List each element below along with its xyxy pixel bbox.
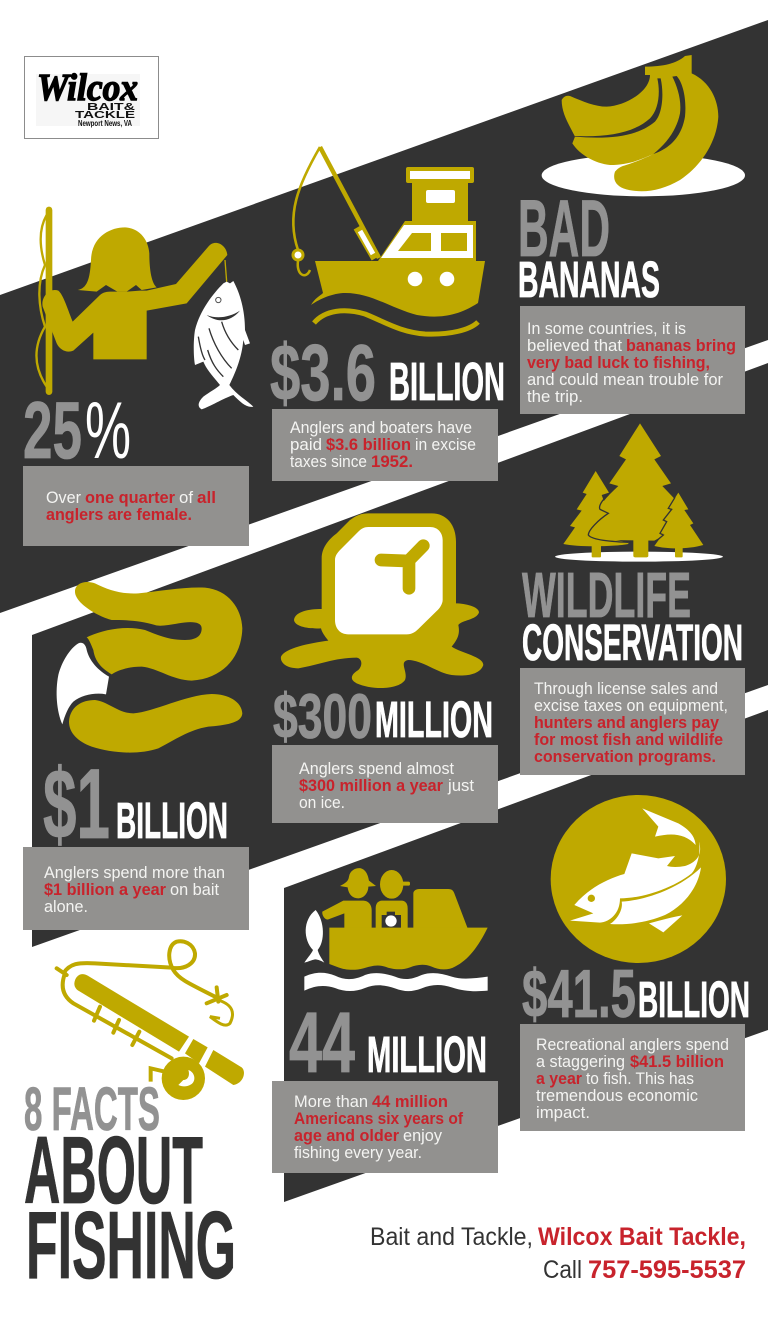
background band: top xyxy=(0,20,768,613)
icon: people on a boat xyxy=(304,868,488,991)
text box: bad luck: the trip. xyxy=(527,388,583,406)
text box: bait spending: alone. xyxy=(44,898,88,916)
text box: bait spending: Anglers spend more than xyxy=(44,864,225,882)
heading: $1 billion: $1 xyxy=(43,748,110,859)
text box: 44 million Americans: age and older xyxy=(294,1127,400,1145)
heading: 44 million: 44 xyxy=(289,995,355,1091)
text box: ice spending: just xyxy=(447,777,474,795)
logo: Wilcox Bait & Tackle: Newport News, VA xyxy=(78,119,132,128)
heading: $1 billion xyxy=(43,748,228,859)
text box: bad luck: believed that xyxy=(527,337,622,355)
text box: excise taxes: $3.6 billion xyxy=(326,436,411,454)
text box: economic impact: Recreational anglers spend xyxy=(536,1036,729,1054)
text box: 44 million Americans: enjoy xyxy=(403,1127,443,1145)
footer: contact: 757-595-5537 xyxy=(588,1256,746,1284)
text box: conservation programs: hunters and anglers pay xyxy=(534,714,720,732)
panel: 44 million Americans xyxy=(272,868,498,1173)
panel: $41.5 billion economic impact xyxy=(520,795,750,1131)
heading: bad bananas: BANANAS xyxy=(518,251,660,308)
logo: Wilcox Bait & Tackle xyxy=(24,56,158,138)
heading: 25%: 25 xyxy=(23,386,82,476)
text box: 44 million Americans xyxy=(272,1081,498,1173)
text box: bait spending: $1 billion a year xyxy=(44,881,167,899)
title: 8 facts about fishing: ABOUT xyxy=(24,1117,203,1224)
title: 8 facts about fishing xyxy=(24,1075,236,1299)
panel: 25 percent female anglers xyxy=(23,210,253,546)
text box: 44 million Americans: 44 million xyxy=(372,1093,448,1111)
icon: bait worm xyxy=(57,582,242,753)
panel: $300 million on ice xyxy=(272,513,498,823)
footer: contact xyxy=(370,1223,746,1284)
text box: bait spending: on bait xyxy=(170,881,219,899)
icon: fishing boat xyxy=(293,147,485,334)
heading: $300 million xyxy=(273,682,493,752)
heading: 44 million xyxy=(289,995,487,1091)
panel: $3.6 billion excise taxes xyxy=(270,147,505,481)
text box: one quarter: anglers are female. xyxy=(46,506,192,524)
text box: one quarter: Over xyxy=(46,489,81,507)
background band: middle xyxy=(32,363,768,947)
text box: conservation programs: conservation programs. xyxy=(534,748,716,766)
heading: 44 million: MILLION xyxy=(367,1026,487,1083)
footer: contact: Bait and Tackle, xyxy=(370,1223,533,1251)
text box: excise taxes: taxes since xyxy=(290,453,367,471)
heading: $300 million: $300 xyxy=(273,682,372,752)
title: 8 facts about fishing: 8 FACTS xyxy=(24,1075,160,1143)
heading: $1 billion: BILLION xyxy=(116,792,228,849)
text box: ice spending: Anglers spend almost xyxy=(299,760,454,778)
text box: economic impact xyxy=(520,1024,745,1131)
panel: wildlife conservation xyxy=(520,423,745,775)
text box: 44 million Americans: fishing every year. xyxy=(294,1144,422,1162)
icon: melting ice block xyxy=(281,513,483,688)
text box: excise taxes xyxy=(272,409,498,481)
text box: conservation programs: for most fish and wildlife xyxy=(534,731,723,749)
text box: excise taxes: Anglers and boaters have xyxy=(290,419,472,437)
heading: $41.5 billion: $41.5 xyxy=(522,956,636,1032)
logo: Wilcox Bait & Tackle: TACKLE xyxy=(75,110,135,121)
text box: conservation programs xyxy=(520,668,745,775)
heading: $300 million: MILLION xyxy=(375,691,493,748)
text box: excise taxes: 1952. xyxy=(371,453,413,471)
panel: bad bananas xyxy=(518,55,745,414)
heading: bad bananas: BAD xyxy=(518,184,610,274)
text box: bad luck: In some countries, it is xyxy=(527,320,686,338)
text box: 44 million Americans: Americans six years of xyxy=(294,1110,463,1128)
text box: economic impact: tremendous economic xyxy=(536,1087,698,1105)
heading: $3.6 billion: $3.6 xyxy=(270,328,376,417)
text box: excise taxes: paid xyxy=(290,436,322,454)
text box: one quarter: all xyxy=(197,489,216,507)
text box: ice spending: $300 million a year xyxy=(299,777,444,795)
text box: bait spending xyxy=(23,847,249,930)
text box: bad luck xyxy=(520,306,745,414)
footer: contact: Call xyxy=(543,1256,582,1284)
icon: fishing rod and reel xyxy=(57,941,244,1100)
icon: pine trees xyxy=(555,423,723,562)
heading: bad bananas xyxy=(518,184,660,308)
text box: ice spending: on ice. xyxy=(299,794,345,812)
text box: conservation programs: Through license sales and xyxy=(534,680,718,698)
text box: economic impact: a staggering xyxy=(536,1053,625,1071)
text box: bad luck: very bad luck to fishing, xyxy=(527,354,710,372)
footer: contact: Wilcox Bait Tackle, xyxy=(538,1223,746,1251)
text box: bad luck: and could mean trouble for xyxy=(527,371,723,389)
text box: one quarter: of xyxy=(179,489,193,507)
heading: $3.6 billion xyxy=(270,328,505,417)
heading: $3.6 billion: BILLION xyxy=(389,352,505,412)
background band: bottom xyxy=(284,710,768,1202)
title: 8 facts about fishing: FISHING xyxy=(26,1192,236,1299)
logo: Wilcox Bait & Tackle: Wilcox xyxy=(37,67,138,109)
text box: 44 million Americans: More than xyxy=(294,1093,368,1111)
heading: 25%: % xyxy=(85,386,131,476)
text box: bad luck: bananas bring xyxy=(626,337,736,355)
panel: $1 billion on bait xyxy=(23,582,249,930)
text box: economic impact: $41.5 billion xyxy=(630,1053,724,1071)
text box: excise taxes: in excise xyxy=(415,436,476,454)
text box: economic impact: a year xyxy=(536,1070,583,1088)
icon: fish in gold circle xyxy=(551,795,726,963)
heading: wildlife conservation xyxy=(522,559,743,671)
text box: one quarter: one quarter xyxy=(85,489,176,507)
text box: ice spending xyxy=(272,745,498,823)
text box: economic impact: impact. xyxy=(536,1104,590,1122)
text box: conservation programs: excise taxes on equipment, xyxy=(534,697,728,715)
logo: Wilcox Bait & Tackle: BAIT& xyxy=(87,102,135,113)
text box: economic impact: to fish. This has xyxy=(586,1070,694,1088)
icon: woman holding fish xyxy=(36,210,253,409)
text box: one quarter xyxy=(23,466,249,546)
icon: bananas on plate xyxy=(542,55,745,196)
